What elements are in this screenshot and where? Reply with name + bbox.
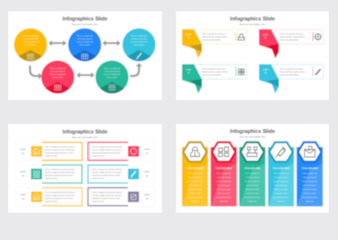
row: step 6: text here sample text here to insert your: [92, 194, 122, 197]
circle: blue: This is a sample text: [77, 34, 93, 38]
row: step 2: STEP: [144, 149, 150, 151]
column: cyan: insert your desired: [274, 176, 288, 179]
card: step 3 teal: STEP: [186, 70, 192, 72]
column: blue: insert your desired: [303, 176, 316, 179]
card: step 1 yellow: This is a sample text insert your: [202, 32, 226, 36]
circle: blue: here to insert: [79, 44, 90, 46]
panel: circles slide: [8, 11, 162, 100]
column: cyan: your desired text here: [273, 196, 289, 199]
panel: flags slide: [176, 11, 329, 100]
circle: blue: text here sample text: [76, 40, 94, 44]
row: step 5: text here sample text here to insert your: [45, 194, 75, 197]
card: step 1 yellow: desired text here sample text here: [202, 36, 228, 38]
column: blue: text here sample text: [302, 180, 318, 183]
circle: teal: [95, 60, 129, 94]
column: cyan: here to insert your: [275, 184, 288, 187]
row: step 3: sample text here: [45, 177, 58, 180]
card: step 4 cyan: [259, 64, 324, 93]
row: step 3: desired text sample text here to insert: [45, 174, 74, 177]
row: step 6: STEP: [144, 194, 150, 196]
row: step 4: text here sample text here to insert your: [92, 171, 122, 174]
row: step 6: [88, 187, 155, 206]
card: step 2 red: desired text here sample text here: [280, 36, 305, 38]
column: blue: desired text sample: [303, 188, 317, 191]
column: blue: sample text: [306, 200, 314, 203]
column: yellow: This is a sample text: [188, 172, 203, 175]
row: step 2: text here sample text here to insert your: [92, 148, 122, 152]
row: step 3: STEP: [20, 172, 26, 174]
card: step 3 teal: to insert your desired text: [202, 74, 221, 76]
column: teal: your desired text here: [245, 196, 260, 199]
row: step 3: 03: [22, 176, 25, 178]
row: step 4: 04: [146, 176, 149, 178]
heading: flags slide title: Infographics Slide: [230, 16, 275, 22]
column: yellow: insert your desired: [188, 176, 202, 179]
card: step 1 yellow: 01: [187, 38, 190, 40]
column: yellow: your desired text here: [187, 196, 203, 199]
card: step 4 cyan: STEP: [263, 70, 269, 72]
column: cyan: text here to insert: [275, 192, 288, 195]
row: step 5: [15, 187, 82, 206]
card: step 1 yellow: to insert your desired text: [202, 38, 221, 42]
column: red: here to insert your: [217, 184, 231, 187]
row: step 2: sample text here: [92, 154, 105, 158]
panel: steps slide: [8, 124, 162, 213]
card: step 2 red: This is a sample text insert your: [280, 32, 304, 36]
arrow: teal to cyan: [130, 66, 139, 76]
circle: cyan: This is a sample text: [131, 34, 148, 38]
column: yellow: text here to insert: [189, 192, 202, 195]
row: step 4: [88, 164, 155, 184]
circle: teal: This is a sample text: [104, 67, 121, 70]
column: yellow: here to insert your: [189, 184, 202, 187]
heading: hexagon slide title: Infographics Slide: [230, 129, 275, 135]
row: step 2: [88, 142, 155, 161]
column: red: TITLE GOES HERE: [216, 168, 233, 170]
card: step 2 red: [259, 29, 324, 58]
row: step 1: [15, 142, 82, 161]
circle: blue: Insert your desired: [77, 38, 92, 40]
row: step 2: 02: [146, 153, 149, 155]
column: red: This is a sample text: [216, 172, 232, 175]
row: step 5: STEP: [20, 194, 26, 196]
row: step 1: This is a sample text insert your desired: [45, 146, 75, 148]
subtitle: circles slide: Enter your sub headline here: [72, 23, 99, 26]
heading: steps slide title: Infographics Slide: [63, 130, 108, 136]
card: step 2 red: to insert your desired text: [280, 38, 299, 42]
circle: yellow: here to insert: [25, 44, 36, 46]
column: red: sample text: [220, 200, 228, 203]
column: yellow: sample text: [191, 200, 200, 203]
row: step 6: desired text sample text here to insert: [92, 197, 121, 200]
card: step 4 cyan: to insert your desired text: [280, 74, 299, 76]
row: step 4: desired text sample text here to insert: [92, 174, 121, 177]
row: step 5: 05: [22, 198, 25, 200]
column: red: desired text sample: [217, 188, 231, 191]
arrow: blue to cyan: [102, 40, 120, 46]
circle: red: here to insert: [52, 76, 63, 79]
subtitle: steps slide: Enter your sub headline here: [72, 136, 99, 139]
row: step 4: STEP: [144, 172, 150, 174]
column: blue: [297, 141, 323, 206]
circle: cyan: here to insert: [134, 44, 145, 46]
column: red: insert your desired: [217, 176, 230, 179]
card: step 4 cyan: This is a sample text insert your: [280, 68, 304, 70]
circle: red: Insert your desired: [50, 70, 65, 73]
column: red: text here to insert: [218, 192, 230, 195]
circle: teal: Insert your desired: [105, 70, 119, 73]
circle: teal: here to insert: [107, 76, 118, 79]
card: step 3 teal: 03: [187, 72, 190, 74]
card: step 3 teal: desired text here sample text here: [202, 70, 228, 74]
arrow head: teal to cyan: [136, 63, 142, 66]
row: step 3: This is a sample text insert your desired: [45, 168, 75, 171]
circle: teal: text here sample text: [104, 73, 121, 76]
row: step 5: desired text sample text here to insert: [45, 197, 74, 200]
subtitle: hexagon slide: Enter your sub headline here: [240, 136, 266, 138]
circle: cyan: text here sample text: [131, 40, 148, 44]
row: step 1: sample text here: [45, 154, 58, 158]
circle: yellow: [13, 28, 48, 62]
circle: red: text here sample text: [49, 73, 67, 76]
column: teal: here to insert your: [246, 184, 259, 187]
column: blue: here to insert your: [303, 184, 317, 187]
arrow head: yellow to red: [38, 73, 42, 79]
column: red: [211, 141, 237, 206]
column: yellow: TITLE GOES HERE: [187, 168, 204, 170]
circle: yellow: This is a sample text: [22, 34, 39, 38]
column: blue: This is a sample text: [302, 172, 318, 175]
column: yellow: [182, 141, 208, 206]
card: step 1 yellow: [182, 29, 246, 58]
column: cyan: desired text sample: [274, 188, 288, 191]
column: blue: your desired text here: [302, 196, 318, 199]
card: step 1 yellow: STEP: [186, 34, 192, 36]
card: step 2 red: STEP: [263, 34, 269, 36]
row: step 5: This is a sample text insert your desired: [45, 191, 75, 194]
row: step 5: sample text here: [45, 200, 58, 203]
row: step 4: sample text here: [92, 177, 105, 180]
row: step 6: sample text here: [92, 200, 105, 203]
column: teal: text here to insert: [246, 192, 259, 195]
column: cyan: [268, 141, 294, 206]
row: step 1: desired text sample text here to insert: [45, 152, 74, 154]
column: cyan: sample text: [277, 200, 286, 203]
card: step 2 red: 02: [264, 38, 267, 40]
column: red: text here sample text: [216, 180, 232, 183]
card: step 3 teal: This is a sample text insert your: [202, 68, 226, 70]
column: cyan: text here sample text: [274, 180, 289, 183]
row: step 1: 01: [22, 153, 25, 155]
column: teal: insert your desired: [246, 176, 259, 179]
column: teal: sample text: [248, 200, 257, 203]
row: step 4: This is a sample text insert your desired: [92, 168, 122, 171]
row: step 1: text here sample text here to insert your: [45, 148, 75, 152]
row: step 2: This is a sample text insert your desired: [92, 146, 122, 148]
column: yellow: desired text sample: [188, 188, 202, 191]
column: teal: This is a sample text: [245, 172, 260, 175]
column: red: your desired text here: [216, 196, 232, 199]
circle: yellow: text here sample text: [22, 40, 39, 44]
column: yellow: text here sample text: [188, 180, 203, 183]
circle: blue: [67, 28, 102, 62]
column: blue: text here to insert: [304, 192, 316, 195]
row: step 3: [15, 164, 82, 184]
row: step 2: desired text sample text here to insert: [92, 152, 121, 154]
column: teal: text here sample text: [245, 180, 260, 183]
arrow: yellow to red: [30, 66, 39, 76]
column: cyan: TITLE GOES HERE: [273, 168, 290, 170]
circle: cyan: [122, 28, 156, 62]
circle: yellow: Insert your desired: [23, 38, 38, 40]
card: step 4 cyan: 04: [264, 72, 267, 74]
column: teal: desired text sample: [245, 188, 259, 191]
row: step 6: 06: [146, 198, 149, 200]
row: step 3: text here sample text here to insert your: [45, 171, 75, 174]
circle: cyan: Insert your desired: [132, 38, 146, 40]
circle: red: This is a sample text: [50, 67, 66, 70]
column: blue: TITLE GOES HERE: [302, 168, 319, 170]
card: step 3 teal: [182, 64, 246, 93]
row: step 1: STEP: [20, 149, 26, 151]
column: cyan: This is a sample text: [274, 172, 289, 175]
subtitle: flags slide: Enter your sub headline here: [240, 23, 266, 26]
column: teal: TITLE GOES HERE: [244, 168, 261, 170]
circle: red: [40, 60, 75, 94]
arrow: red to teal: [76, 72, 94, 78]
row: step 6: This is a sample text insert your desired: [92, 191, 122, 194]
card: step 4 cyan: desired text here sample text here: [280, 70, 305, 74]
panel: hexagon columns slide: [176, 124, 329, 213]
column: teal: [239, 141, 265, 206]
heading: circles slide title: Infographics Slide: [63, 16, 108, 22]
arrow: yellow to blue: [48, 40, 66, 46]
